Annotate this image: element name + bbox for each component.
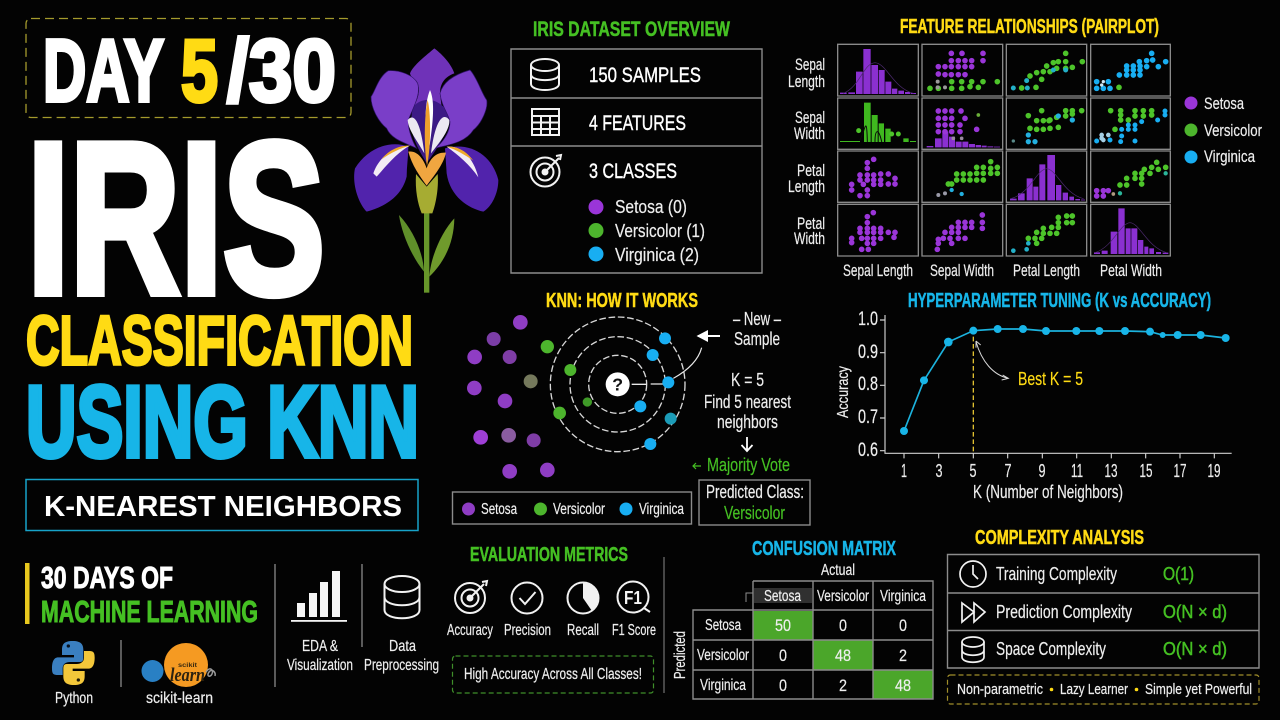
icon: accuracy target — [455, 581, 487, 613]
matrix table: 0 — [779, 676, 787, 695]
icon: scikit-learn logo: scikit — [178, 663, 197, 669]
metric labels: Recall — [567, 622, 599, 639]
eda label: EDA & — [302, 638, 338, 655]
matrix table: 48 — [835, 646, 851, 665]
metric labels: Accuracy — [447, 622, 493, 639]
callout: knn traits — [948, 675, 1259, 704]
icon: database — [531, 59, 559, 90]
x axis labels: 19 — [1208, 461, 1220, 481]
matrix table: 2 — [839, 676, 847, 695]
icon: recall pie — [568, 582, 599, 614]
matrix table: 48 — [895, 676, 911, 695]
y axis labels: 0.8 — [858, 374, 878, 395]
scikit-learn label: scikit-learn — [146, 690, 213, 707]
heading: confusion matrix: CONFUSION MATRIX — [752, 538, 896, 560]
title: CLASSIFICATION: CLASSIFICATION — [26, 302, 413, 380]
classes row: 3 CLASSES — [589, 160, 677, 183]
predicted class box: Predicted Class: — [706, 482, 804, 502]
arrow: new sample pointer — [696, 330, 720, 342]
heading: overview: IRIS DATASET OVERVIEW — [533, 18, 730, 41]
training row: O(1) — [1163, 564, 1194, 584]
callout: knn traits: Lazy Learner — [1060, 682, 1128, 698]
pairplot column labels — [843, 261, 1162, 280]
callout: knn traits: Non-parametric — [957, 682, 1043, 698]
class list: Virginica (2) — [615, 245, 699, 265]
prediction row: Prediction Complexity — [996, 602, 1132, 622]
day badge — [26, 18, 351, 120]
overview table frame — [511, 49, 762, 273]
x axis labels: 13 — [1104, 461, 1118, 481]
pairplot row labels: Sepal — [795, 108, 825, 127]
pairplot row labels: Petal — [797, 161, 825, 180]
title: IRIS: IRIS — [27, 97, 325, 339]
y axis labels: 0.9 — [858, 342, 878, 363]
class list: Setosa (0) — [615, 197, 687, 217]
pairplot row labels: Sepal — [795, 55, 825, 74]
majority vote: Majority Vote — [707, 455, 790, 475]
callout: knn traits: Simple yet Powerful — [1145, 682, 1252, 698]
panel: confusion matrix — [672, 538, 933, 699]
line chart — [880, 315, 1232, 458]
pairplot row labels: Width — [794, 229, 825, 248]
knn legend: Setosa — [481, 501, 517, 518]
y axis title: Accuracy — [835, 366, 852, 418]
icon: table — [532, 109, 559, 135]
space row: Space Complexity — [996, 639, 1106, 659]
panel: complexity analysis — [948, 527, 1259, 704]
callout: high accuracy — [452, 656, 654, 693]
icon: bar chart — [291, 571, 347, 622]
preprocessing label — [364, 638, 439, 674]
panel: hyperparameter tuning — [835, 290, 1232, 502]
panel: pairplot — [788, 16, 1262, 280]
knn legend: Versicolor — [553, 501, 605, 518]
x axis labels: 1 — [901, 461, 907, 481]
title: USING KNN: USING KNN — [26, 366, 419, 478]
knn steps text: Find 5 nearest — [704, 392, 791, 412]
matrix table: 0 — [899, 616, 907, 635]
pairplot legend: Virginica — [1204, 147, 1255, 166]
x axis title: K (Number of Neighbors) — [973, 482, 1123, 502]
pairplot legend — [1184, 94, 1262, 166]
predicted axis label: Predicted — [672, 631, 689, 679]
y axis labels: 1.0 — [858, 309, 878, 330]
preprocessing label: Data — [389, 638, 416, 655]
pairplot column labels: Sepal Length — [843, 261, 913, 280]
day badge: DAY — [43, 21, 164, 120]
x axis labels: 15 — [1140, 461, 1152, 481]
icon: f1 score — [618, 582, 650, 612]
matrix table — [693, 581, 933, 699]
predicted class box — [699, 480, 810, 525]
new sample label — [733, 309, 781, 349]
actual axis label: Actual — [821, 562, 855, 579]
x axis labels: 11 — [1071, 461, 1083, 481]
icon: precision check — [512, 582, 542, 614]
day badge: /30 — [227, 21, 336, 120]
metric labels: F1 Score — [612, 622, 656, 639]
y axis labels — [858, 309, 878, 461]
y axis labels: 0.7 — [858, 407, 878, 428]
matrix table: Setosa — [764, 588, 801, 605]
x axis labels: 7 — [1004, 461, 1012, 481]
heading: metrics: EVALUATION METRICS — [470, 544, 628, 566]
class list — [588, 197, 705, 265]
panel: 30 days of machine learning — [25, 560, 439, 707]
space row — [996, 639, 1227, 659]
matrix table: 2 — [899, 646, 907, 665]
matrix table: Setosa — [705, 617, 741, 634]
matrix table: 0 — [779, 646, 787, 665]
prediction row: O(N × d) — [1163, 602, 1227, 622]
y axis labels: 0.6 — [858, 440, 878, 461]
python label: Python — [55, 690, 93, 707]
matrix table: Virginica — [880, 588, 926, 605]
matrix table: Virginica — [700, 677, 746, 694]
panel: iris dataset overview — [511, 18, 762, 273]
subtitle badge: K-NEAREST NEIGHBORS — [44, 491, 402, 523]
preprocessing label: Preprocessing — [364, 657, 439, 674]
icon: iris flower — [354, 48, 498, 293]
icon: target — [530, 155, 561, 186]
knn steps text — [704, 370, 791, 432]
callout: best k: Best K = 5 — [1018, 369, 1083, 389]
x axis labels: 3 — [936, 461, 942, 481]
knn legend: Virginica — [639, 501, 684, 518]
new sample label: Sample — [734, 329, 780, 349]
heading: pairplot: FEATURE RELATIONSHIPS (PAIRPLOT) — [900, 16, 1159, 38]
accent bar — [25, 563, 30, 624]
space row: O(N × d) — [1163, 639, 1227, 659]
knn steps text: neighbors — [717, 412, 778, 432]
pairplot row labels: Length — [788, 177, 825, 196]
matrix table: 50 — [775, 616, 791, 635]
class list: Versicolor (1) — [615, 221, 705, 241]
icon: scikit-learn logo — [142, 643, 215, 687]
metric labels: Precision — [504, 622, 551, 639]
icon: database — [962, 637, 984, 662]
x axis labels: 5 — [970, 461, 976, 481]
icon: database — [384, 576, 420, 618]
callout: high accuracy: High Accuracy Across All Classes! — [464, 666, 642, 683]
subtitle badge — [26, 480, 418, 530]
pairplot grid — [838, 44, 1170, 256]
training row: Training Complexity — [996, 564, 1117, 584]
day badge: 5 — [181, 21, 218, 120]
knn diagram: ? — [612, 375, 623, 395]
knn diagram — [467, 315, 702, 479]
icon: scikit-learn logo: learn — [170, 665, 205, 686]
pairplot legend: Versicolor — [1204, 121, 1262, 140]
arrow: down to vote — [742, 437, 752, 451]
pairplot legend: Setosa — [1204, 94, 1244, 113]
pairplot column labels: Sepal Width — [930, 261, 994, 280]
new sample label: – New – — [733, 309, 781, 329]
eda label — [287, 638, 353, 674]
heading: 30 days of: 30 DAYS OF — [41, 560, 173, 595]
icon: python logo — [52, 641, 95, 685]
panel: evaluation metrics — [447, 544, 664, 693]
samples row: 150 SAMPLES — [589, 64, 701, 87]
pairplot column labels: Petal Width — [1100, 261, 1162, 280]
features row: 4 FEATURES — [589, 112, 686, 135]
pairplot row labels: Petal — [797, 214, 825, 233]
x axis labels: 9 — [1038, 461, 1046, 481]
x axis labels — [901, 461, 1220, 481]
panel: knn how it works — [452, 290, 810, 525]
icon: clock — [960, 561, 986, 587]
matrix table: 0 — [839, 616, 847, 635]
matrix table: Versicolor — [697, 647, 749, 664]
icon: f1 score: F1 — [624, 588, 642, 608]
metric labels — [447, 622, 656, 639]
x axis labels: 17 — [1174, 461, 1186, 481]
pairplot row labels: Width — [794, 124, 825, 143]
pairplot column labels: Petal Length — [1013, 261, 1080, 280]
knn legend — [452, 492, 692, 524]
knn steps text: K = 5 — [731, 370, 764, 390]
eda label: Visualization — [287, 657, 353, 674]
pairplot row labels — [788, 55, 825, 248]
heading: knn: KNN: HOW IT WORKS — [546, 290, 698, 312]
title block — [26, 18, 419, 530]
icon: fast forward — [962, 603, 985, 622]
pairplot row labels: Length — [788, 72, 825, 91]
predicted class box: Versicolor — [724, 503, 785, 523]
heading: complexity: COMPLEXITY ANALYSIS — [975, 527, 1144, 549]
heading: machine learning: MACHINE LEARNING — [41, 594, 258, 629]
complexity table frame — [948, 554, 1259, 668]
matrix table: Versicolor — [817, 588, 869, 605]
